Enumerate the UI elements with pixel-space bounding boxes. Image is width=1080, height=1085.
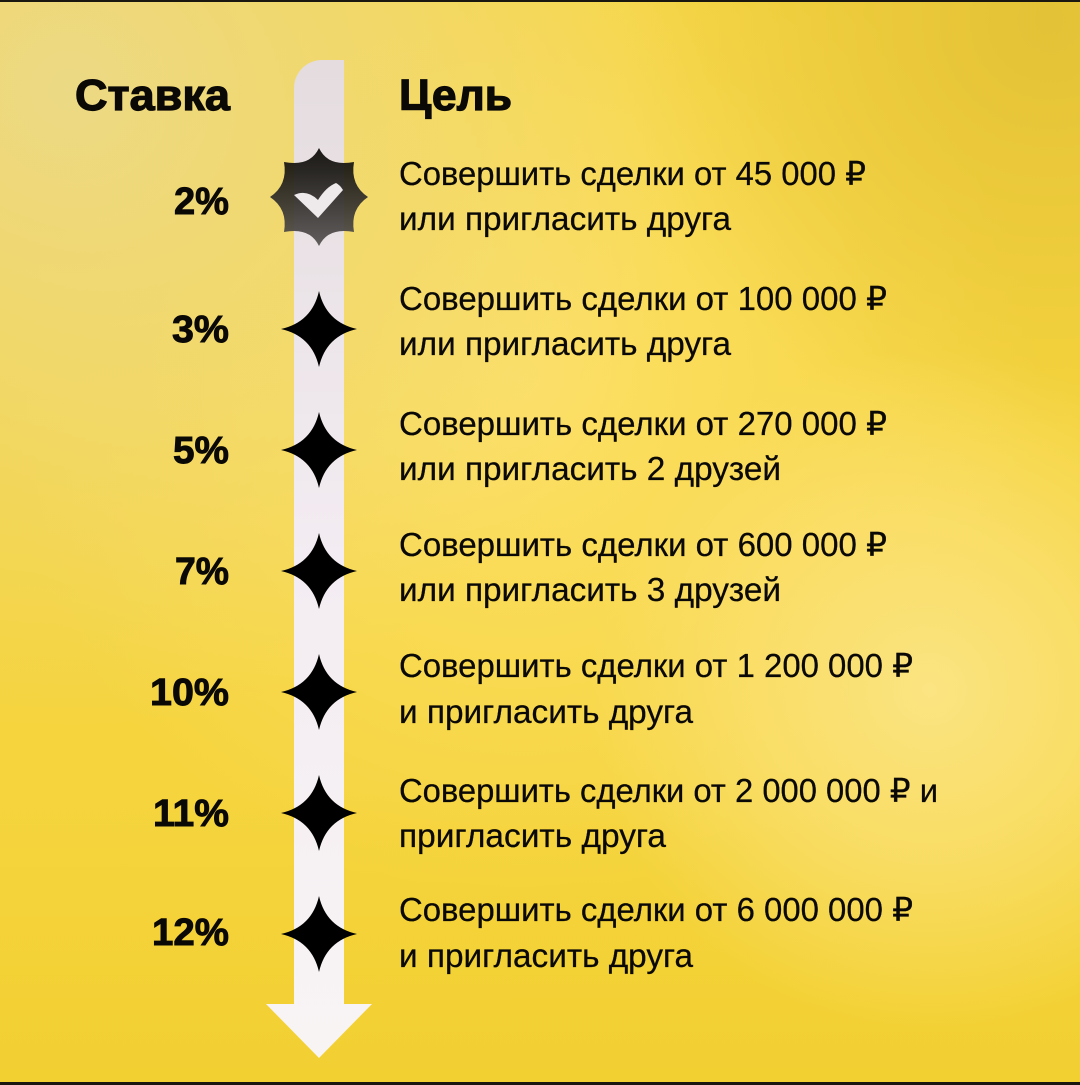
goal 3%: Совершить сделки от 100 000 ₽ bbox=[399, 280, 887, 317]
goal 11% bbox=[399, 772, 938, 854]
goal 11%: Совершить сделки от 2 000 000 ₽ и bbox=[399, 772, 938, 809]
goal 2%: или пригласить друга bbox=[399, 200, 732, 237]
goal 7% bbox=[399, 526, 887, 608]
goal 3% bbox=[399, 280, 887, 362]
goal 11%: пригласить друга bbox=[399, 817, 667, 854]
icon: star 12% bbox=[281, 896, 357, 972]
goal 12%: и пригласить друга bbox=[399, 937, 694, 974]
rate 10%: 10% bbox=[150, 672, 229, 714]
icon: star 7% bbox=[281, 533, 357, 609]
rate 7%: 7% bbox=[175, 551, 229, 593]
heading: goal: Цель bbox=[399, 71, 512, 120]
rate 12%: 12% bbox=[152, 912, 229, 954]
icon: completed badge with check bbox=[270, 148, 368, 246]
icon: star 10% bbox=[281, 654, 357, 730]
goal 5%: Совершить сделки от 270 000 ₽ bbox=[399, 405, 887, 442]
goal 10%: Совершить сделки от 1 200 000 ₽ bbox=[399, 647, 913, 684]
rate 2%: 2% bbox=[174, 181, 229, 223]
icon: star 3% bbox=[281, 291, 357, 367]
goal 2%: Совершить сделки от 45 000 ₽ bbox=[399, 155, 866, 192]
goal 3%: или пригласить друга bbox=[399, 325, 732, 362]
goal 12% bbox=[399, 891, 913, 974]
heading: rate: Ставка bbox=[75, 71, 231, 120]
goal 5% bbox=[399, 405, 887, 487]
goal 10%: и пригласить друга bbox=[399, 693, 694, 730]
arrow bbox=[266, 60, 372, 1058]
goal 7%: или пригласить 3 друзей bbox=[399, 571, 781, 608]
goal 5%: или пригласить 2 друзей bbox=[399, 450, 781, 487]
rate 11%: 11% bbox=[153, 793, 229, 835]
goal 12%: Совершить сделки от 6 000 000 ₽ bbox=[399, 891, 913, 928]
icon: star 11% bbox=[281, 775, 357, 851]
rate 3%: 3% bbox=[172, 309, 229, 351]
goal 2% bbox=[399, 155, 866, 237]
goal 10% bbox=[399, 647, 913, 730]
icon: star 5% bbox=[281, 412, 357, 488]
goal 7%: Совершить сделки от 600 000 ₽ bbox=[399, 526, 887, 563]
rate 5%: 5% bbox=[173, 430, 229, 472]
